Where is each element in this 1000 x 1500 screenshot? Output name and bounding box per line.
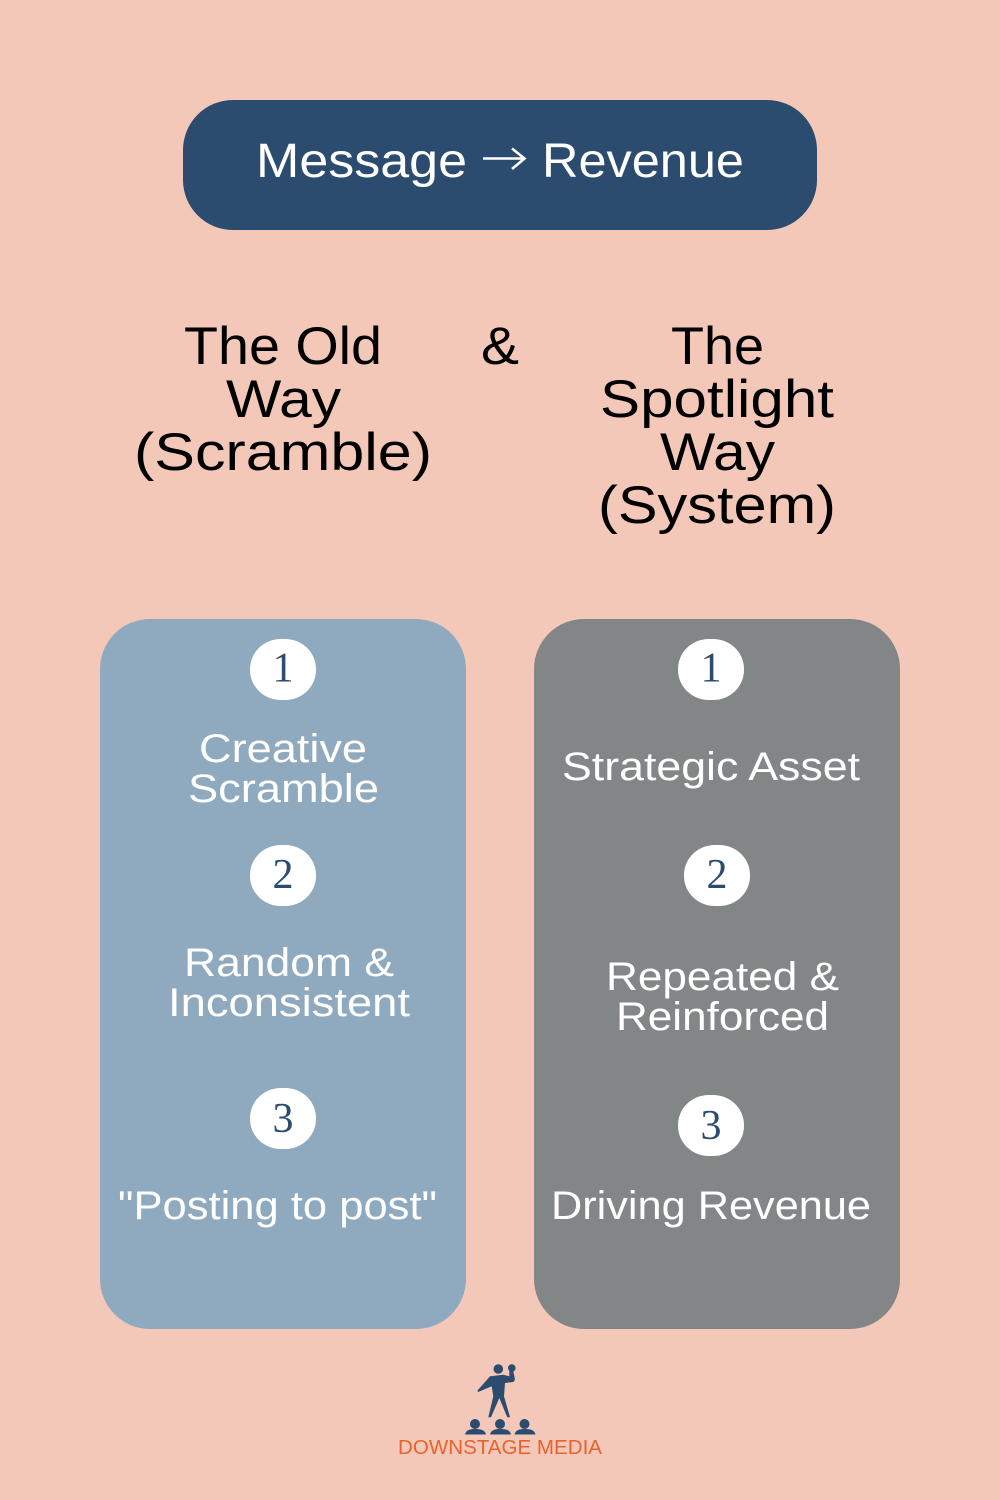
item: creative scramble: Scramble	[188, 767, 379, 811]
badge 3	[678, 1095, 744, 1156]
title banner	[183, 100, 817, 230]
item: creative scramble: Creative	[199, 727, 367, 771]
heading: the spotlight way: (System)	[598, 476, 836, 535]
item: random and inconsistent: Inconsistent	[168, 981, 410, 1025]
badge 2	[684, 845, 750, 906]
heading: the spotlight way: Way	[660, 423, 776, 482]
title banner: Revenue	[542, 135, 744, 188]
logo: downstage media	[398, 1364, 603, 1459]
heading: the old way: (Scramble)	[134, 423, 432, 482]
item: strategic asset: Strategic Asset	[562, 745, 860, 789]
heading: the old way: Way	[226, 370, 342, 429]
badge 3: 3	[272, 1096, 294, 1142]
title banner: Message	[256, 135, 467, 188]
badge 1: 1	[700, 646, 722, 692]
badge 1	[678, 639, 744, 700]
icon: speaker on stage with audience	[465, 1364, 536, 1434]
item: random and inconsistent	[168, 941, 410, 1025]
heading: the spotlight way	[598, 317, 836, 535]
panel: spotlight way	[534, 619, 900, 1329]
panel: old way	[100, 619, 466, 1329]
item: driving revenue: Driving Revenue	[551, 1184, 871, 1228]
arrow	[483, 148, 524, 169]
item: posting to post: "Posting to post"	[118, 1184, 437, 1228]
heading: the old way	[134, 317, 432, 482]
heading: the old way: The Old	[184, 317, 382, 376]
logo wordmark: DOWNSTAGE MEDIA	[398, 1437, 603, 1459]
badge 2	[250, 845, 316, 906]
badge 3	[250, 1088, 316, 1149]
heading: the spotlight way: The	[671, 317, 764, 376]
badge 1	[250, 639, 316, 700]
item: repeated and reinforced	[606, 955, 839, 1039]
heading: the spotlight way: Spotlight	[600, 370, 834, 429]
badge 2: 2	[706, 852, 728, 898]
item: creative scramble	[188, 727, 379, 811]
item: random and inconsistent: Random &	[184, 941, 394, 985]
badge 2: 2	[272, 852, 294, 898]
item: repeated and reinforced: Reinforced	[616, 995, 829, 1039]
item: repeated and reinforced: Repeated &	[606, 955, 839, 999]
badge 1: 1	[272, 646, 294, 692]
badge 3: 3	[700, 1103, 722, 1149]
ampersand: &	[481, 317, 519, 376]
